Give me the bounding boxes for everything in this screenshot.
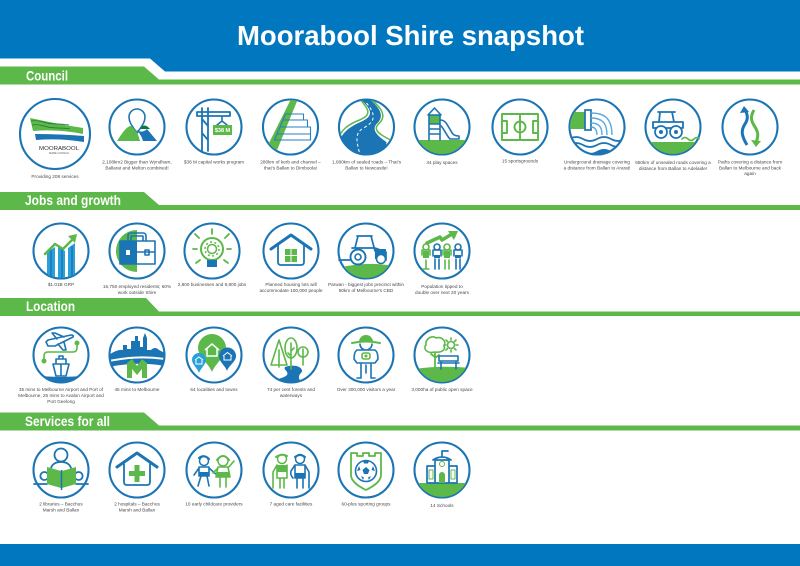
icon: tractor xyxy=(338,224,394,280)
title: Moorabool Shire snapshot xyxy=(237,20,584,51)
caption: airports: 35 mins to Melbourne Airport and Port of xyxy=(19,387,104,392)
caption: employed residents: work outside Shire xyxy=(118,290,157,295)
caption: open space: 3,000ha of public open space xyxy=(411,387,473,392)
section: Location xyxy=(0,298,800,404)
heading tab: Jobs and growth: Jobs and growth xyxy=(25,193,121,208)
caption: play spaces: 34 play spaces xyxy=(426,160,458,165)
caption: Melbourne: 45 mins to Melbourne xyxy=(114,387,160,392)
icon: library reader xyxy=(34,442,88,498)
icon: house xyxy=(264,224,318,278)
icon: hospital xyxy=(110,442,164,498)
icon: road roller xyxy=(645,100,701,156)
caption: sporting groups: 60-plus sporting groups xyxy=(342,502,391,506)
icon: park bench and tree xyxy=(414,328,470,384)
caption: paths: Ballan to Melbourne and back xyxy=(719,165,782,170)
caption: visitors: Over 300,000 visitors a year xyxy=(337,387,396,392)
caption: drainage: Underground drainage covering xyxy=(564,160,630,164)
icon: kerb and channel xyxy=(263,100,318,154)
icon: children xyxy=(186,442,242,498)
caption: housing: Planned housing lots will xyxy=(265,282,317,287)
icon: forests and river xyxy=(264,328,318,385)
icon: drainage pipe xyxy=(569,100,625,157)
caption: Parwan: 50km of Melbourne's CBD xyxy=(339,288,394,293)
caption: unsealed roads: distance from Ballan to Adelaide! xyxy=(639,166,707,171)
icon: light bulb xyxy=(184,224,240,278)
header band xyxy=(0,0,800,72)
heading tab: Council xyxy=(0,66,800,84)
caption: childcare: 10 early childcare providers xyxy=(185,502,243,506)
icon: visitor with camera xyxy=(338,328,394,382)
caption: sealed roads: 1,080km of sealed roads – That's xyxy=(332,160,402,164)
icon: briefcase xyxy=(110,224,164,278)
icon: paths arrows xyxy=(722,100,778,154)
caption: forests: 74 per cent forests and xyxy=(267,387,315,392)
caption: airports: Port Geelong xyxy=(47,399,75,404)
icon: school xyxy=(414,442,470,499)
caption: population: Population tipped to xyxy=(421,284,463,289)
icon: shield and football xyxy=(338,442,394,498)
icon: population xyxy=(414,224,470,278)
caption: unsealed roads: 650km of unsealed roads covering a xyxy=(635,160,711,165)
caption: kerb: 280km of kerb and channel – xyxy=(260,160,321,164)
caption: hospitals: 2 hospitals – Bacchus xyxy=(114,502,160,506)
icon: sealed road xyxy=(338,100,394,157)
caption: housing: accommodate 100,000 people xyxy=(259,288,323,293)
icon: Moorabool logo xyxy=(20,99,90,169)
heading tab: Location xyxy=(0,298,800,316)
caption: hospitals: Marsh and Ballan xyxy=(119,507,156,512)
heading tab: Location: Location xyxy=(26,299,75,314)
icon: Melbourne skyline xyxy=(109,328,165,382)
icon: aged care couple xyxy=(264,442,318,498)
icon: map pin and hills xyxy=(110,100,164,154)
caption: Parwan: Parwan - biggest jobs precinct within xyxy=(328,282,404,287)
caption: population: double over next 20 years xyxy=(415,290,470,295)
caption: area: Ballarat and Melton combined! xyxy=(105,165,169,170)
caption: libraries: 2 libraries – Bacchus xyxy=(39,502,83,506)
icon: crane with sign xyxy=(186,100,242,154)
icon: crane with sign: $38 M xyxy=(215,128,231,134)
section: Services for all xyxy=(0,412,800,512)
heading tab: Jobs and growth xyxy=(0,192,800,210)
heading tab: Council: Council xyxy=(26,68,68,84)
heading tab: Services for all xyxy=(0,412,800,430)
caption: paths: Paths covering a distance from xyxy=(718,160,782,164)
icon: play space xyxy=(414,100,470,156)
caption: schools: 14 Schools xyxy=(430,503,454,508)
caption: libraries: Marsh and Ballan xyxy=(43,507,80,512)
caption: sportsgrounds: 15 sportsgrounds xyxy=(502,158,539,164)
caption: paths: again xyxy=(744,171,756,176)
icon: location pins xyxy=(186,328,242,382)
caption: area: 2,108km2 Bigger than Wyndham, xyxy=(102,160,172,164)
caption: capital works: $38 M capital works program xyxy=(184,160,244,164)
caption: localities: 64 localities and towns xyxy=(190,387,238,392)
caption: kerb: that's Ballan to Dimboola! xyxy=(264,165,317,170)
icon: Moorabool logo: MOORABOOL xyxy=(39,146,79,152)
caption: services: Providing 208 services xyxy=(31,174,79,179)
icon: plane and ship xyxy=(33,328,89,384)
caption: employed residents: 16,750 employed residents; 60% xyxy=(103,284,171,289)
section: Jobs and growth xyxy=(0,192,800,295)
caption: forests: waterways xyxy=(280,393,303,398)
caption: sealed roads: Ballan to Newcastle! xyxy=(345,165,388,170)
caption: airports: Melbourne, 25 mins to Avalon Airport and xyxy=(18,393,104,398)
icon: sportsground xyxy=(492,100,548,154)
caption: GRP: $1.01B GRP xyxy=(48,282,74,287)
caption: aged care: 7 aged care facilities xyxy=(270,502,313,506)
icon: GRP chart xyxy=(34,224,88,279)
footer band xyxy=(0,544,800,566)
section: Council xyxy=(0,66,800,179)
caption: businesses: 2,800 businesses and 9,800 jobs xyxy=(178,282,247,287)
icon: Moorabool logo: SHIRE COUNCIL xyxy=(49,151,70,155)
caption: drainage: a distance from Ballan to Ararat! xyxy=(564,165,630,170)
heading tab: Services for all: Services for all xyxy=(25,414,110,429)
